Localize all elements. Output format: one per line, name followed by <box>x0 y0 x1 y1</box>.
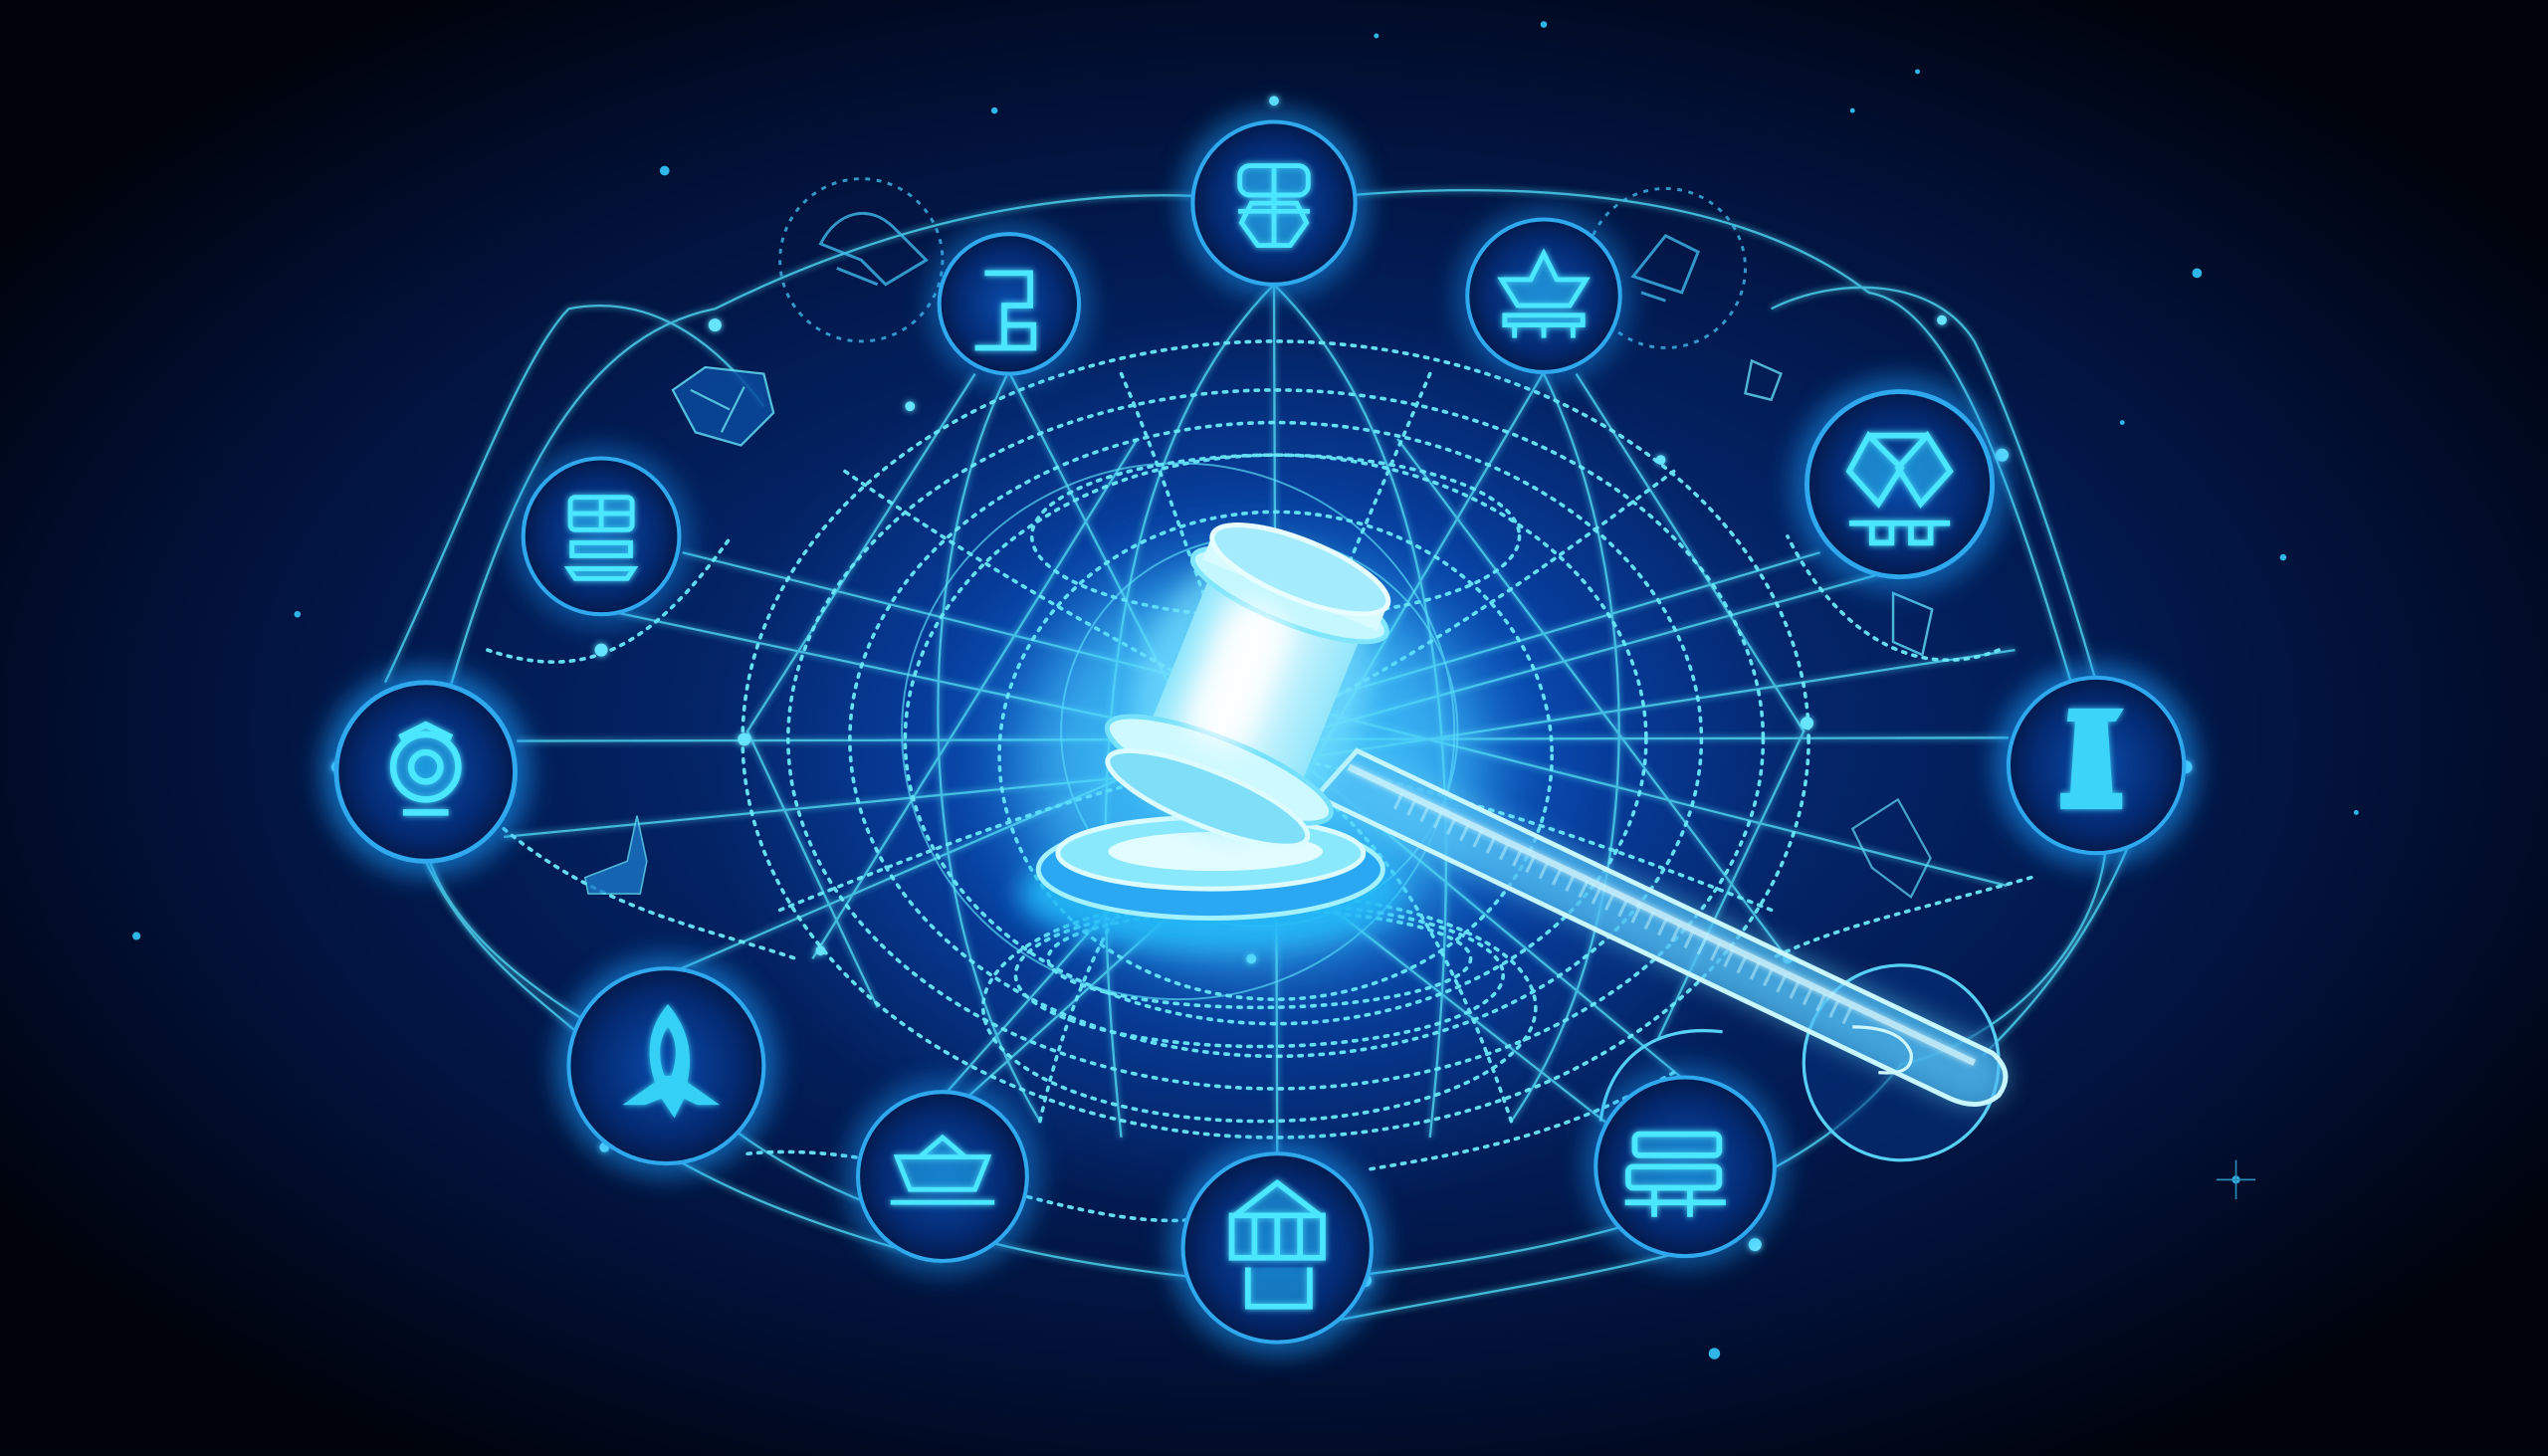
node: far right <box>1996 665 2197 866</box>
node: right upper <box>1793 377 2007 591</box>
gavel halo <box>1024 569 1479 958</box>
node: bottom right <box>1585 1066 1786 1268</box>
node: upper left <box>928 223 1091 385</box>
ghost icon: right small <box>1745 361 1932 655</box>
dotted inner sphere <box>488 341 2031 1220</box>
outer ring <box>421 190 2107 1284</box>
network junction dots <box>331 96 2192 1287</box>
ghost icon: lower right small <box>1852 799 1931 897</box>
sound block <box>1019 817 1402 949</box>
node: bottom left <box>845 1079 1040 1274</box>
node: far left <box>321 668 530 876</box>
ghost icon: left small <box>673 367 773 445</box>
node: left upper <box>512 447 691 626</box>
node: lower left <box>555 955 776 1176</box>
concentric solid rings <box>902 463 1457 999</box>
handle <box>1316 750 2006 1105</box>
central glow <box>707 309 1811 1219</box>
node: top <box>1179 108 1369 298</box>
node: bottom <box>1170 1141 1384 1355</box>
node: upper right <box>1456 208 1631 383</box>
ghost icon: lower left small <box>585 816 647 894</box>
ghost icon: top right outline <box>1586 188 1745 347</box>
network web <box>385 190 2129 1333</box>
ghost icon: top left outline <box>780 179 943 341</box>
ghost circles lower right <box>1600 965 1999 1160</box>
mallet head <box>1085 498 1422 871</box>
gavel <box>1019 498 2006 1105</box>
spoke curves <box>938 285 1619 1138</box>
spokes <box>504 285 2015 1153</box>
